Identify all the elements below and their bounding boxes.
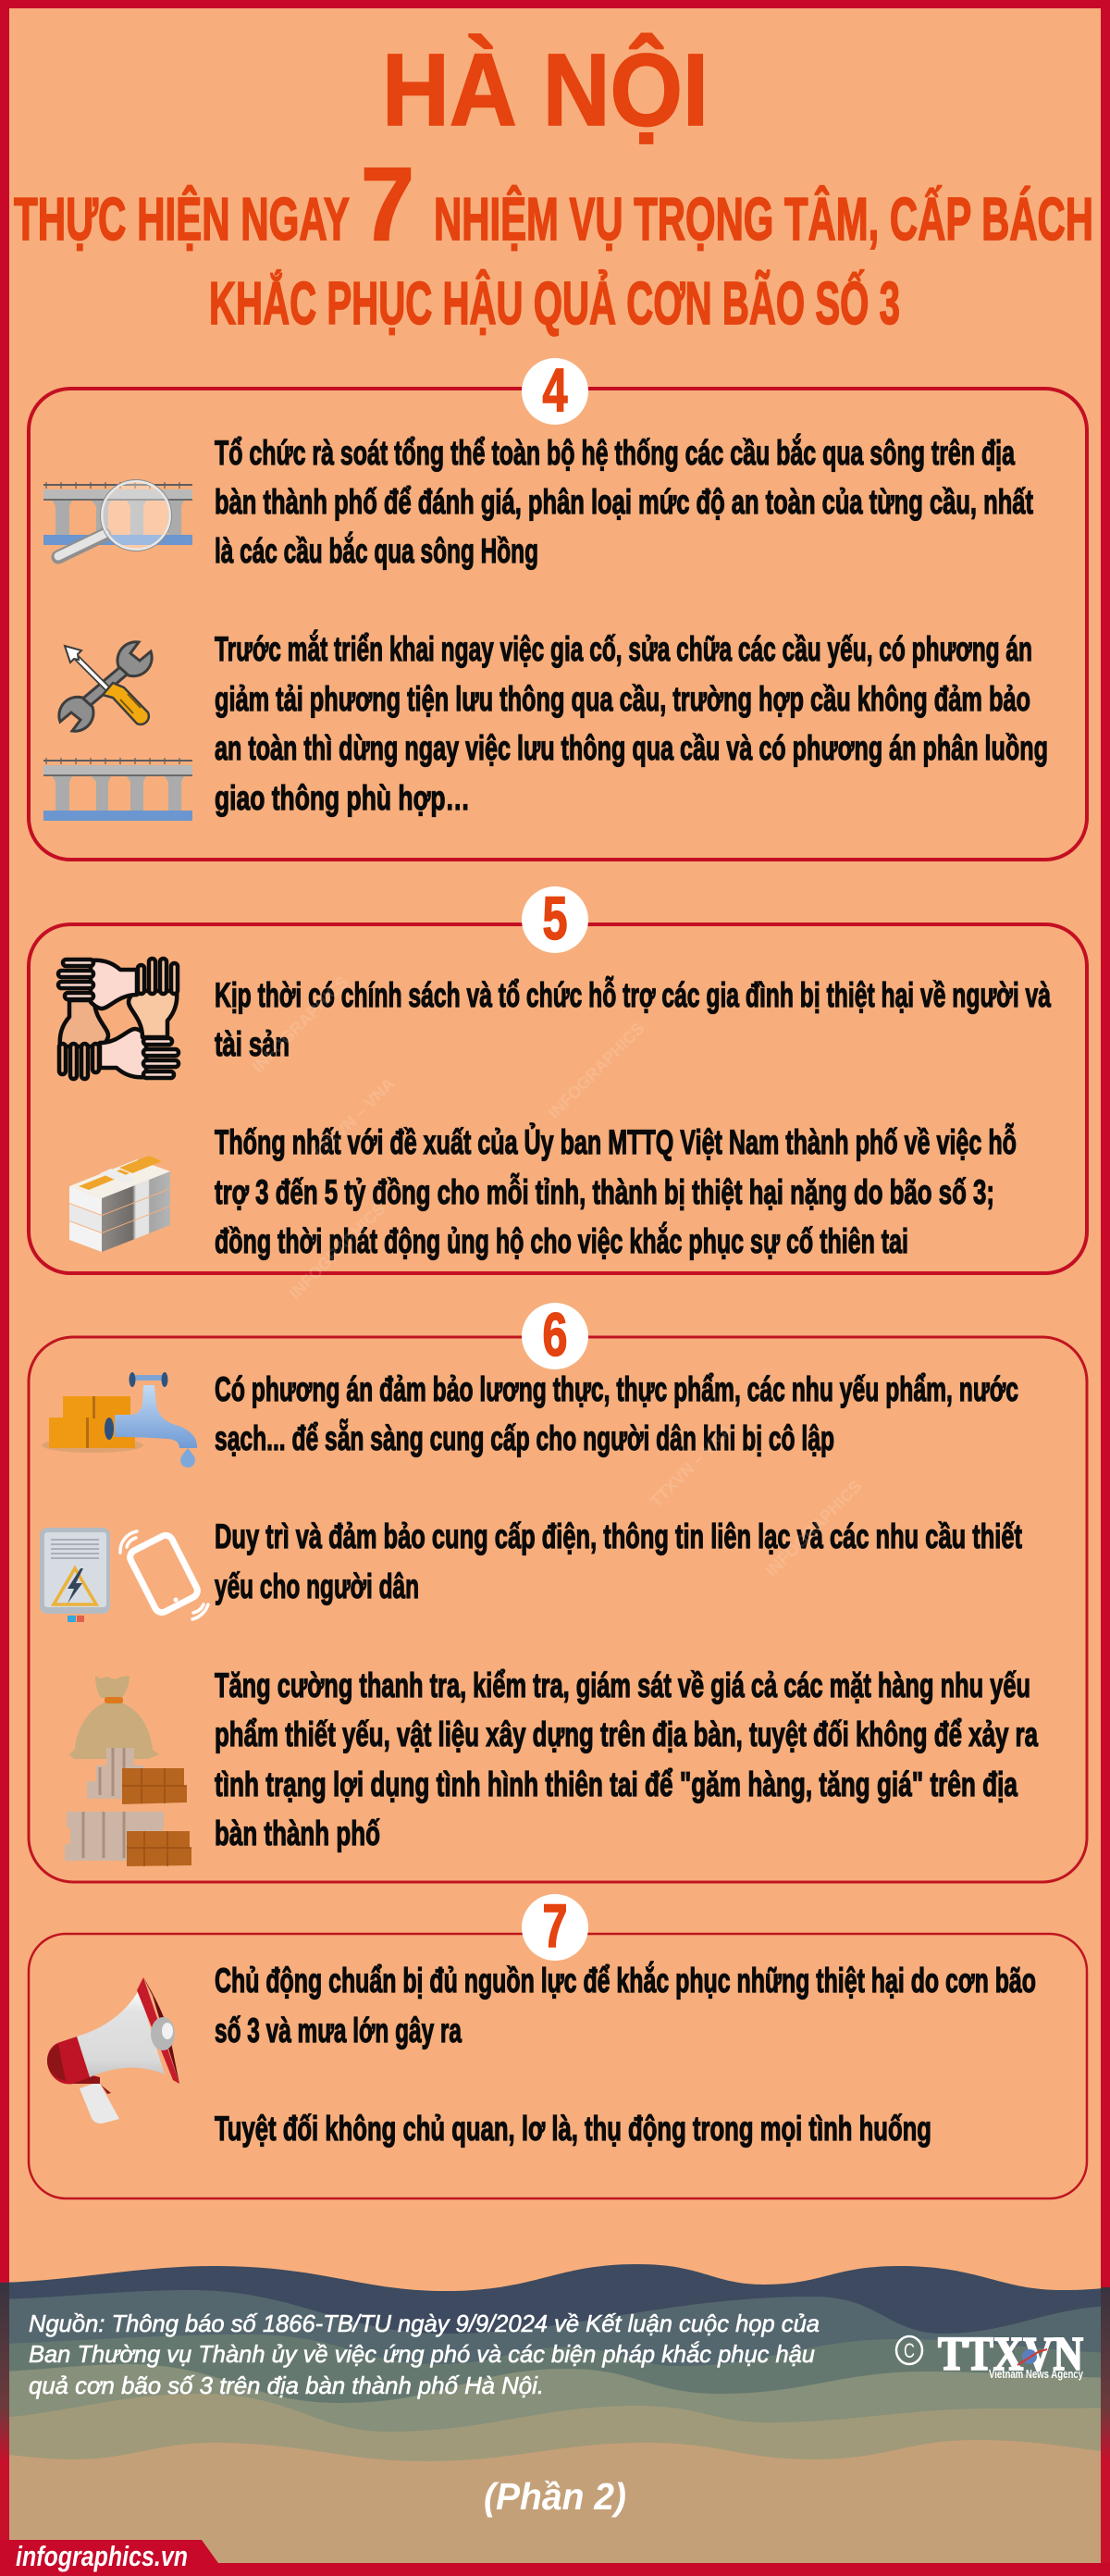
icon: bridge xyxy=(43,758,192,821)
text: food and water xyxy=(215,1370,1018,1457)
number badge 6: 6 xyxy=(542,1300,568,1368)
text: reinforce bridges: giao thông phù hợp… xyxy=(215,779,470,817)
text: financial support xyxy=(215,1122,1017,1260)
logo: TTXVN: TTXVN xyxy=(938,2328,1083,2381)
watermarks: INFOGRAPHICS xyxy=(545,1019,648,1122)
icon: four joined hands xyxy=(58,959,179,1079)
title: line two xyxy=(14,146,1093,262)
text: review of bridges: là các cầu bắc qua sông Hồng xyxy=(215,531,538,570)
watermarks: INFOGRAPHICS xyxy=(249,972,352,1076)
panel: task 6 xyxy=(29,1300,1087,1882)
logo: TTXVN xyxy=(896,2328,1084,2381)
text: prepare resources xyxy=(215,1961,1036,2050)
title: line two: THỰC HIỆN NGAY xyxy=(14,185,350,253)
text: reinforce bridges xyxy=(215,629,1048,817)
text: power and communications: yếu cho người dân xyxy=(215,1567,419,1605)
number badge 5 xyxy=(522,884,588,953)
text: timely support: tài sản xyxy=(215,1025,290,1063)
text: price inspection xyxy=(215,1666,1038,1852)
watermarks: TTXVN – VNA xyxy=(309,1074,399,1164)
watermarks xyxy=(249,972,865,1580)
panel: task 5 xyxy=(29,884,1087,1273)
number badge 7 xyxy=(522,1891,588,1961)
title xyxy=(14,33,1093,337)
icon: boxes and water tap xyxy=(42,1372,197,1468)
source text: Nguồn: Thông báo số 1866-TB/TU ngày 9/9/2024 về Kết luận cuộc họp của xyxy=(29,2310,820,2337)
number badge 5: 5 xyxy=(542,884,568,952)
panel: task 4 xyxy=(29,355,1087,860)
source text: Ban Thường vụ Thành ủy về việc ứng phó và các biện pháp khắc phục hậu xyxy=(29,2340,815,2368)
text: price inspection: bàn thành phố xyxy=(215,1814,380,1852)
icon: electric box and phone xyxy=(40,1528,208,1622)
icon: bridge with magnifier xyxy=(43,479,192,557)
title: Hà Nội: HÀ NỘI xyxy=(382,33,709,147)
source text: quả cơn bão số 3 trên địa bàn thành phố Hà Nội. xyxy=(29,2372,544,2399)
panel: task 7 xyxy=(29,1891,1087,2198)
site tag: infographics.vn xyxy=(16,2540,188,2572)
watermarks: INFOGRAPHICS xyxy=(762,1477,865,1580)
number badge 7: 7 xyxy=(542,1891,568,1960)
part label: (Phần 2) xyxy=(484,2475,626,2518)
text: prepare resources: số 3 và mưa lớn gây ra xyxy=(215,2012,462,2050)
number badge 4: 4 xyxy=(542,355,568,424)
icon: wrench and screwdriver xyxy=(59,642,152,731)
watermarks: TTXVN – VNA xyxy=(647,1421,736,1511)
icon: stacks of money xyxy=(69,1156,170,1252)
text: review of bridges xyxy=(215,433,1033,570)
text: timely support xyxy=(215,976,1051,1063)
source text xyxy=(29,2310,820,2399)
watermarks: INFOGRAPHICS xyxy=(286,1199,388,1303)
text: power and communications xyxy=(215,1517,1022,1605)
number badge 4 xyxy=(522,355,588,425)
logo: TTXVN: C xyxy=(904,2339,915,2362)
number badge 6 xyxy=(522,1300,588,1369)
footer waves xyxy=(0,2264,1110,2576)
icon: megaphone xyxy=(47,1977,179,2124)
icon: sack and goods xyxy=(65,1676,191,1866)
title: line two: 7 xyxy=(361,146,414,262)
